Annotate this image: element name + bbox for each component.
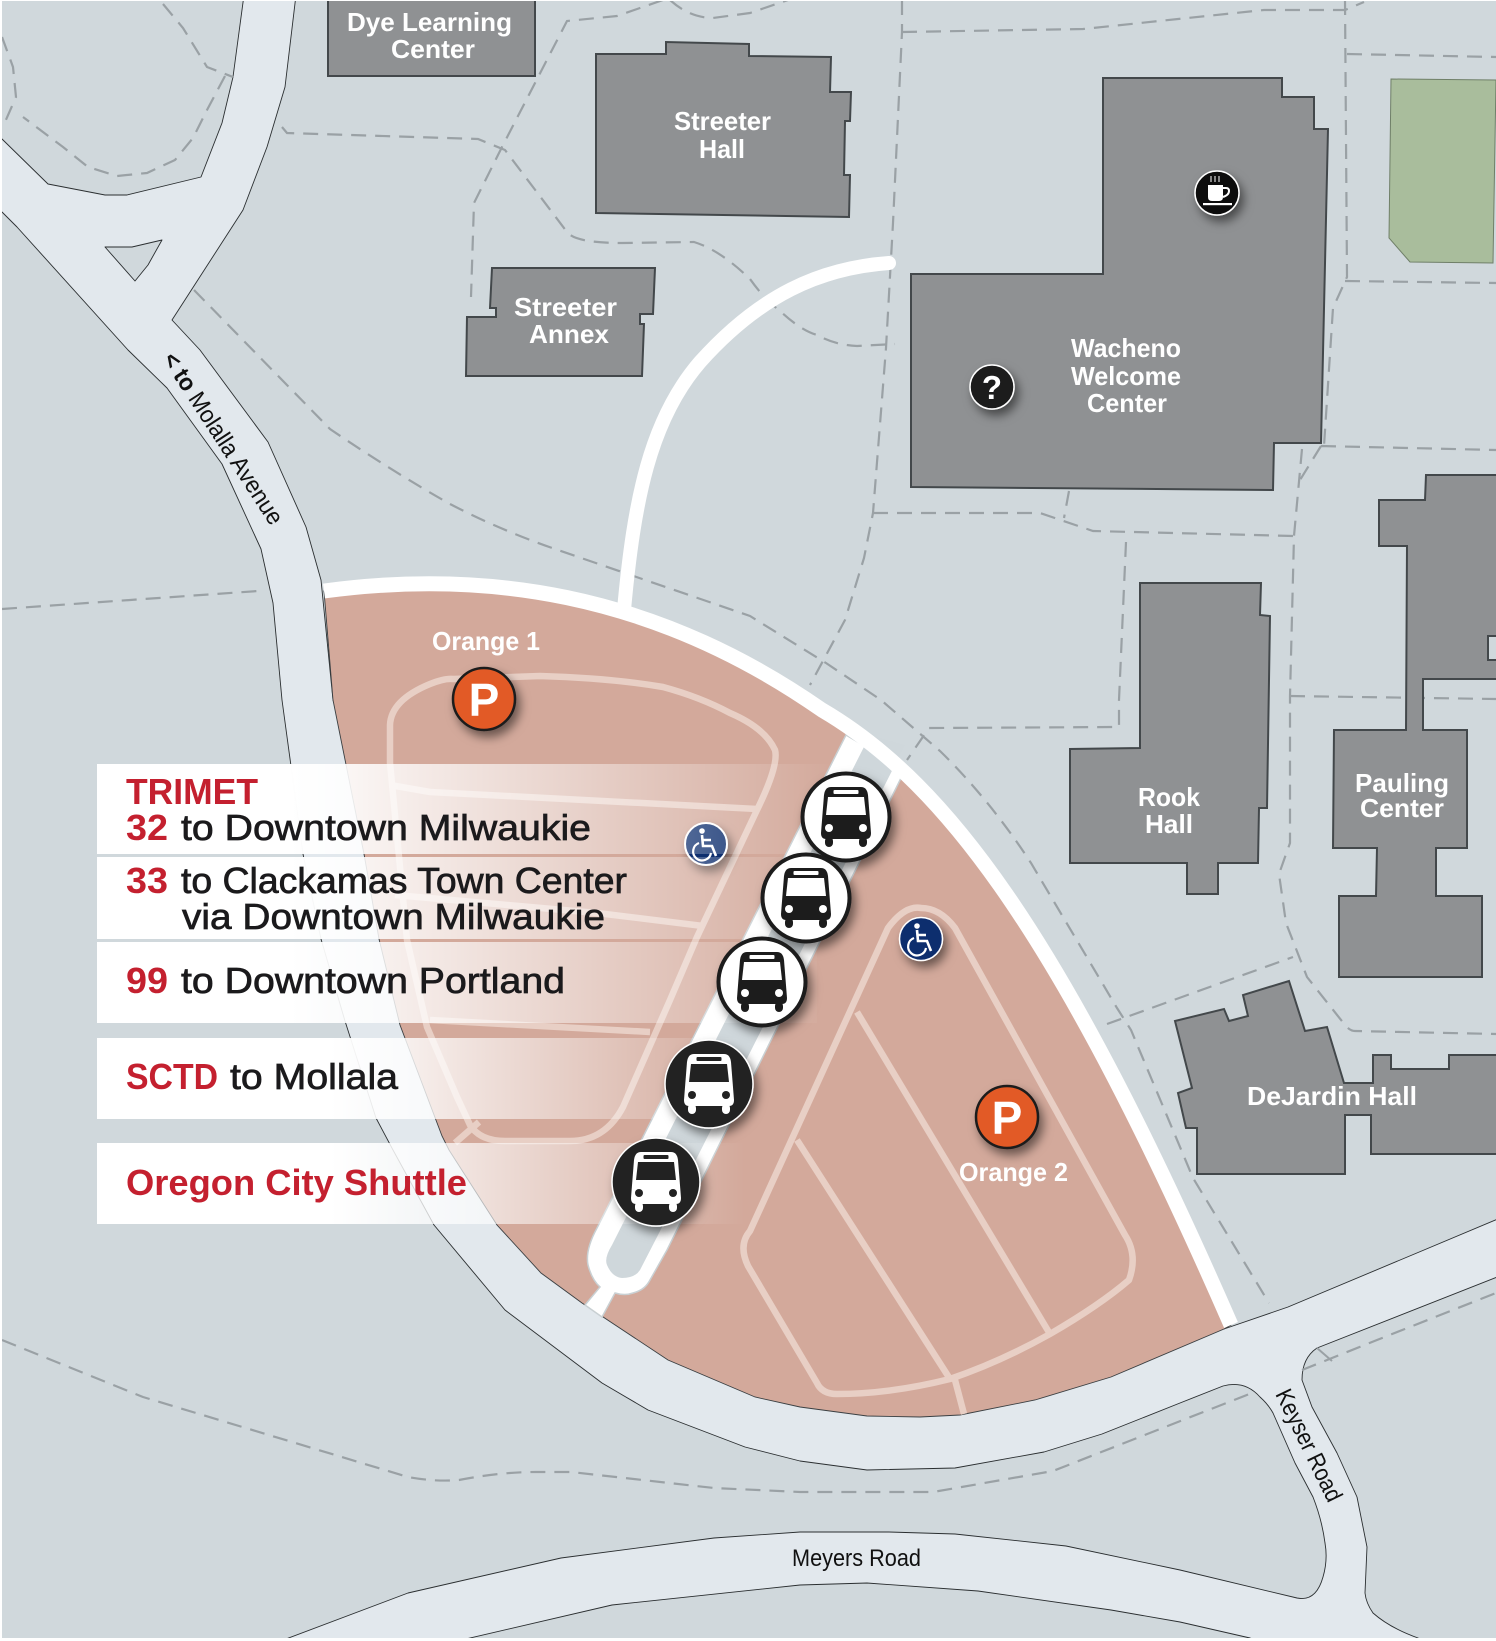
icon: parking Orange 2: P [992,1092,1022,1144]
route SCTD [126,1056,399,1097]
label: DeJardin Hall: DeJardin Hall [1247,1081,1417,1111]
panel: transit routes backgrounds [97,764,850,1224]
icon: bus stop Oregon City Shuttle [612,1138,700,1226]
label: Wacheno Welcome Center [1071,333,1181,418]
icon: accessible parking, Orange 1 [685,823,727,865]
label: Molalla Avenue: < to Molalla Avenue [157,348,289,530]
label: Orange 2: Orange 2 [959,1157,1068,1187]
route 33 [126,860,627,937]
icon: parking Orange 1: P [469,674,499,726]
icon: information question mark: ? [982,369,1002,406]
icon: information question mark [970,365,1014,409]
label: Pauling Center: Center [1360,793,1444,823]
label: Wacheno Welcome Center: Center [1087,388,1167,418]
label: Pauling Center [1355,768,1449,823]
label: Rook Hall: Rook [1138,782,1201,812]
bus lane [585,735,905,1317]
label: Streeter Annex [514,292,617,349]
route SCTD: SCTD [126,1056,218,1097]
route 32: 32 [126,807,168,848]
icon: parking Orange 2 [976,1086,1038,1148]
building: Streeter Annex [466,268,655,376]
route 33: to Clackamas Town Center [181,860,627,901]
icon: accessible parking, Orange 2 [900,918,942,960]
route 32: to Downtown Milwaukie [181,807,591,848]
label: Meyers Road: Meyers Road [792,1545,921,1572]
icon: parking Orange 1 [453,668,515,730]
parking lot markings: Orange 2 [743,908,1133,1414]
land patch: south of Meyers Road [440,1583,1270,1641]
label: Keyser Road: Keyser Road [1270,1385,1347,1506]
route 33: via Downtown Milwaukie [182,896,605,937]
route SCTD: to Mollala [230,1056,399,1097]
label: Streeter Annex: Streeter [514,292,617,322]
icon: bus stop 99 [718,938,806,1026]
label: Rook Hall [1138,782,1201,839]
perimeter walkway [324,584,1231,1325]
label: Dye Learning Center [347,7,512,64]
label: Rook Hall: Hall [1145,809,1193,839]
label: Streeter Hall [674,106,771,164]
icon: coffee [1195,171,1239,215]
label: Streeter Hall: Streeter [674,106,771,136]
route Oregon City Shuttle: Oregon City Shuttle [126,1162,467,1203]
label: Streeter Hall: Hall [699,134,745,164]
land patch: lower left [0,207,1326,1641]
land patch: top-left corner [0,0,244,195]
icon: bus stop 33 [762,854,850,942]
building: Streeter Hall [596,42,851,217]
route 33: 33 [126,860,168,901]
parking lot markings: Orange 1 [390,676,776,1143]
land patch: road island [105,240,162,281]
label: Dye Learning Center: Center [391,34,475,64]
route: TriMet heading: TRIMET [126,771,258,812]
parking lot area [324,584,1231,1417]
building: Pauling Center [1333,475,1496,977]
label: Streeter Annex: Annex [529,319,610,349]
building: DeJardin Hall [1175,981,1496,1174]
building: Dye Learning Center [328,0,535,76]
icon: bus stop SCTD [665,1040,753,1128]
label: Pauling Center: Pauling [1355,768,1449,798]
route 99: to Downtown Portland [181,960,565,1001]
green space [1389,79,1496,263]
route 99: 99 [126,960,168,1001]
land patch: lower right [1302,1274,1496,1641]
label: Orange 1: Orange 1 [432,626,540,656]
building: Wacheno Welcome Center [911,78,1328,490]
entry walkway [624,263,889,610]
icon: bus stop 32 [802,774,890,860]
label: Dye Learning Center: Dye Learning [347,7,512,37]
label: Wacheno Welcome Center: Welcome [1071,361,1181,391]
building: Rook Hall [1070,583,1270,894]
land patch: campus [172,0,1496,1330]
label: Wacheno Welcome Center: Wacheno [1071,333,1181,363]
